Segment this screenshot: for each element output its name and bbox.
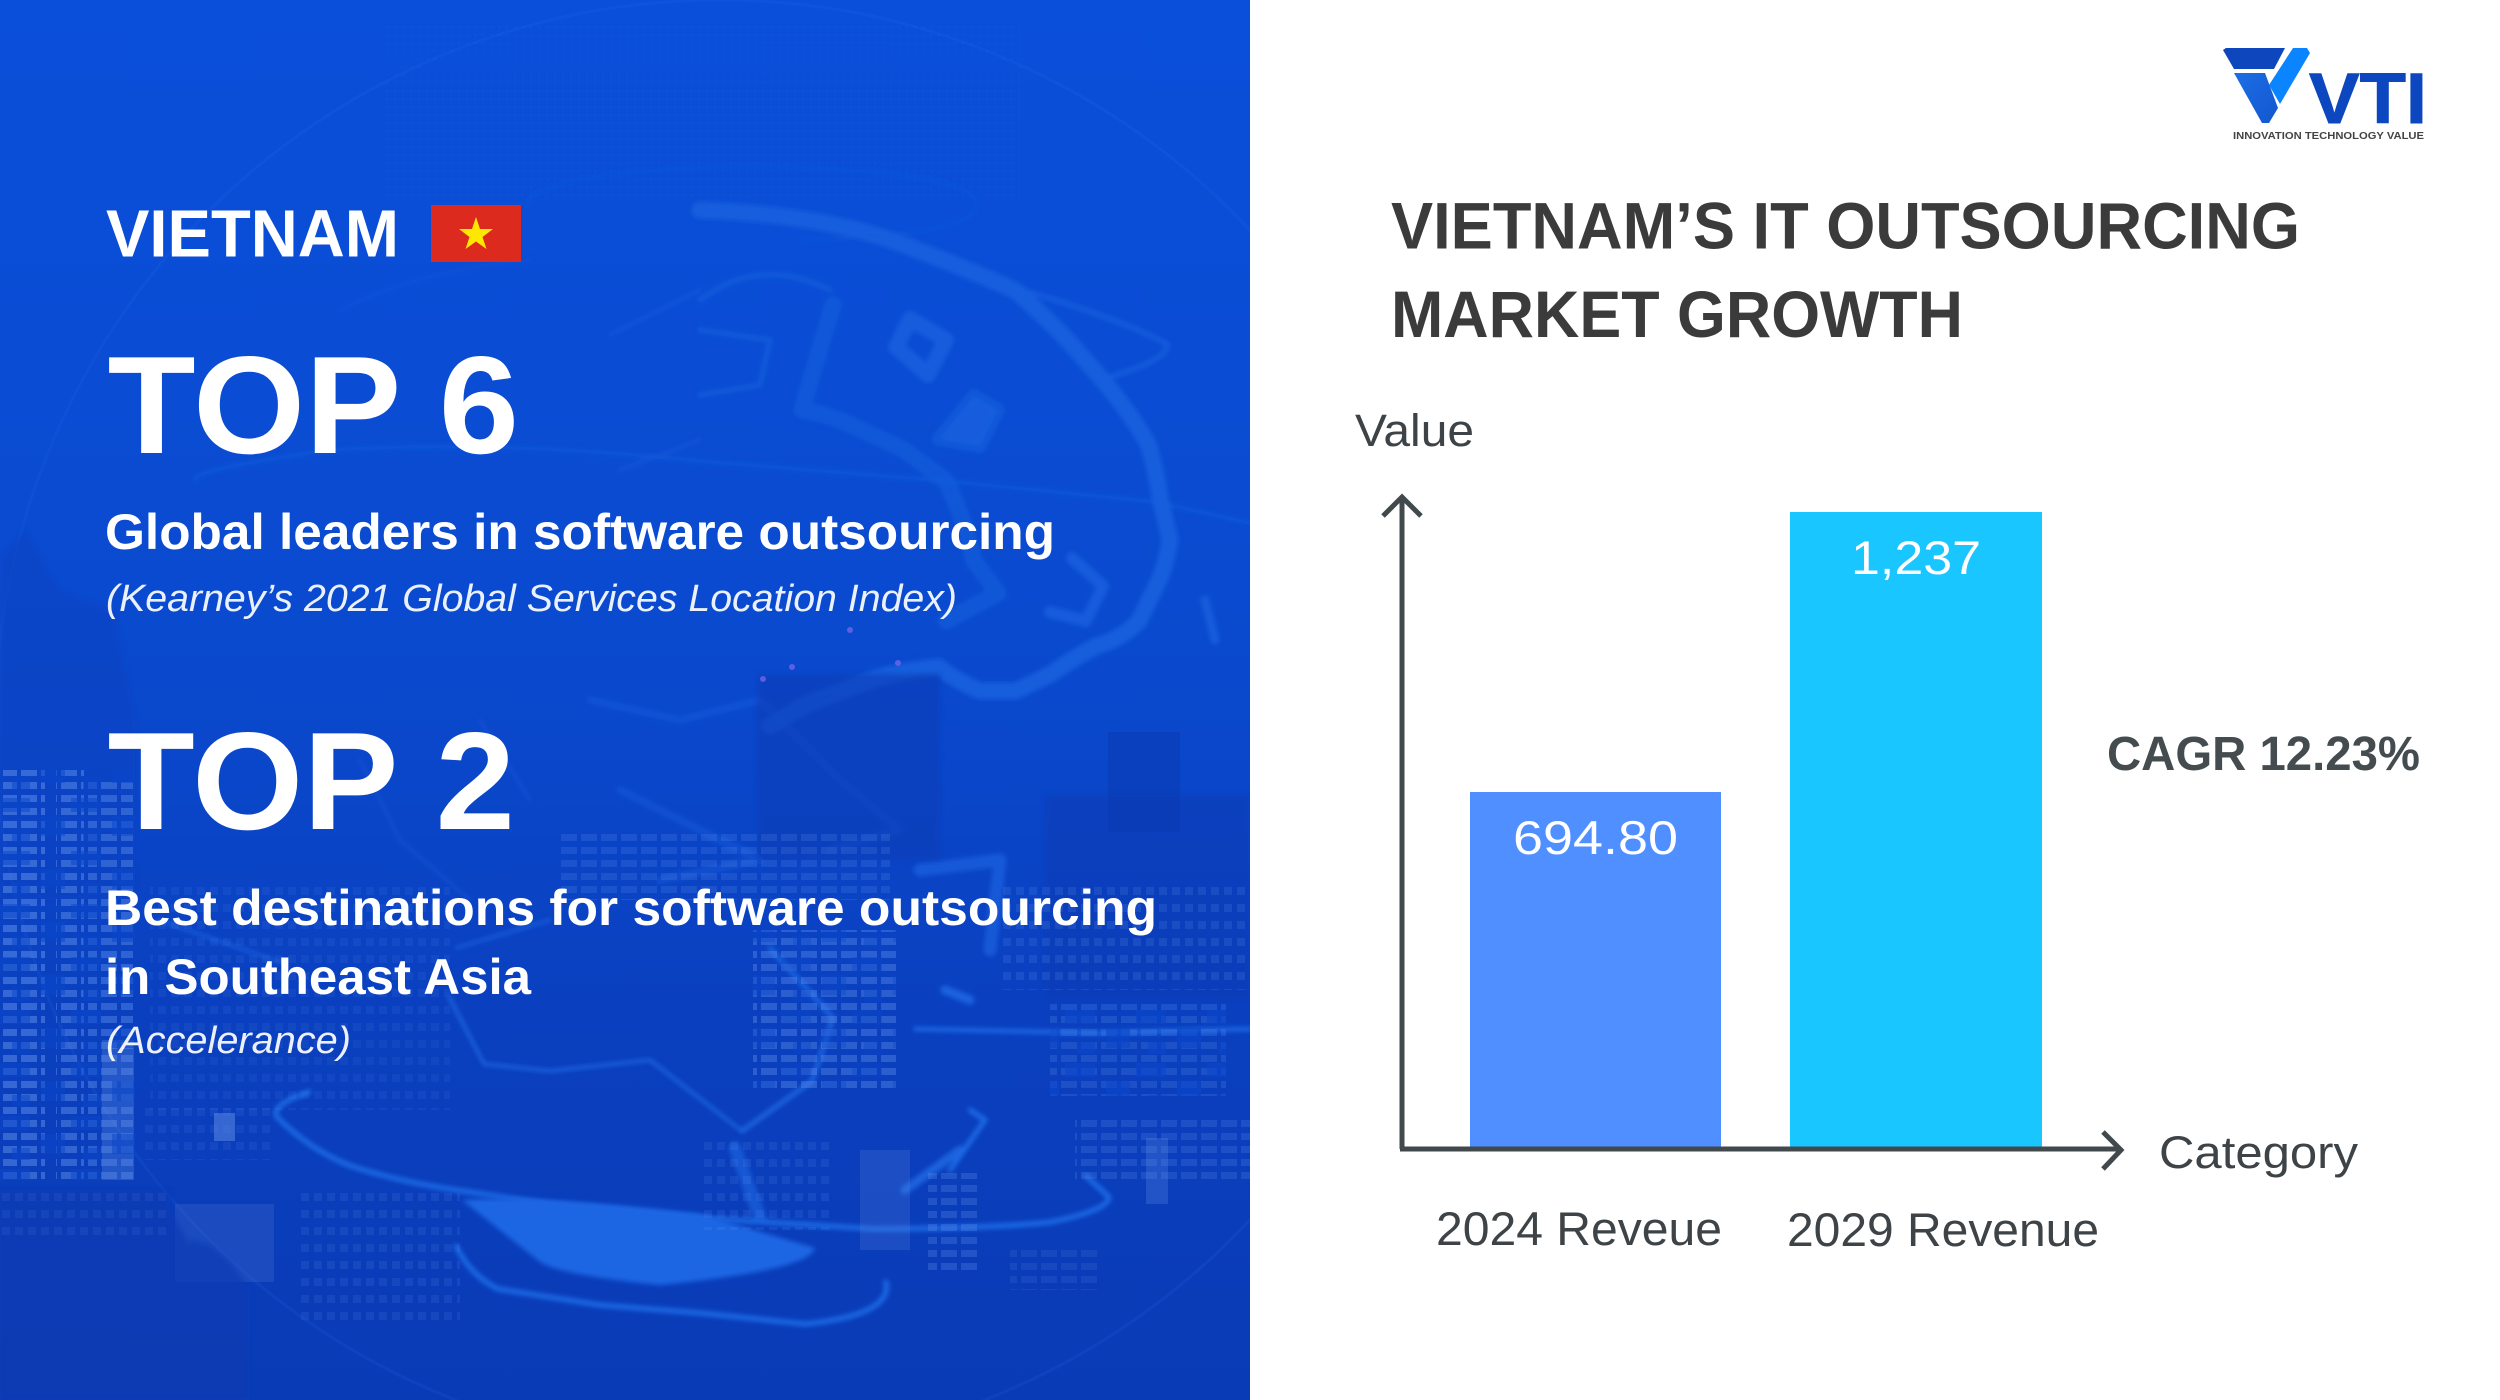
heading: Vietnam: VIETNAM (106, 196, 399, 272)
globe continents (158, 166, 1250, 1324)
axis: category (1400, 1132, 2121, 1169)
dotted outer sphere (0, 0, 1445, 1400)
label: 2024: 2024 Reveue (1436, 1202, 1722, 1255)
city skyline overlay (0, 530, 1250, 1400)
chart title (1391, 188, 2300, 351)
icon: Vietnam flag (431, 205, 521, 262)
text: Best destinations (105, 880, 1157, 1005)
bar chart (1355, 405, 2359, 1256)
panel: blue background with globe and city (0, 0, 1250, 1400)
southern continents and rings (276, 1092, 1109, 1229)
stat: Top 6: TOP 6 (108, 328, 519, 483)
text: Best destinations: Best destinations for software outsourcing (105, 880, 1157, 936)
text: Best destinations: in Southeast Asia (105, 949, 532, 1005)
source: Accelerance: (Accelerance) (106, 1020, 351, 1062)
stat: Top 2: TOP 2 (108, 704, 515, 859)
logo: VTI: VTI (2309, 60, 2427, 139)
label: category axis: Category (2159, 1127, 2359, 1178)
text: Global leaders: Global leaders in software outsourcing (105, 504, 1055, 560)
bar: 2024 revenue: 694.80 (1513, 811, 1678, 864)
pink city lights (760, 627, 901, 682)
chart title: VIETNAM’S IT OUTSOURCING (1391, 188, 2300, 262)
central and right windows (140, 830, 1250, 1290)
label: 2029: 2029 Revenue (1787, 1203, 2099, 1256)
bar: 2024 revenue (1470, 792, 1721, 1149)
logo: VTI (2223, 48, 2427, 142)
axis: value (1383, 497, 1421, 1149)
label: value axis: Value (1355, 405, 1474, 456)
bar: 2029 revenue: 1,237 (1851, 531, 1981, 584)
callout: CAGR: CAGR 12.23% (2107, 728, 2420, 781)
chart title: MARKET GROWTH (1391, 277, 1963, 351)
logo: VTI: INNOVATION TECHNOLOGY VALUE (2233, 131, 2424, 142)
lower buildings (175, 1204, 274, 1282)
left tower windows (0, 770, 135, 1180)
bar: 2029 revenue (1790, 512, 2042, 1149)
source: Kearney: (Kearney’s 2021 Global Services Location Index) (106, 578, 957, 620)
